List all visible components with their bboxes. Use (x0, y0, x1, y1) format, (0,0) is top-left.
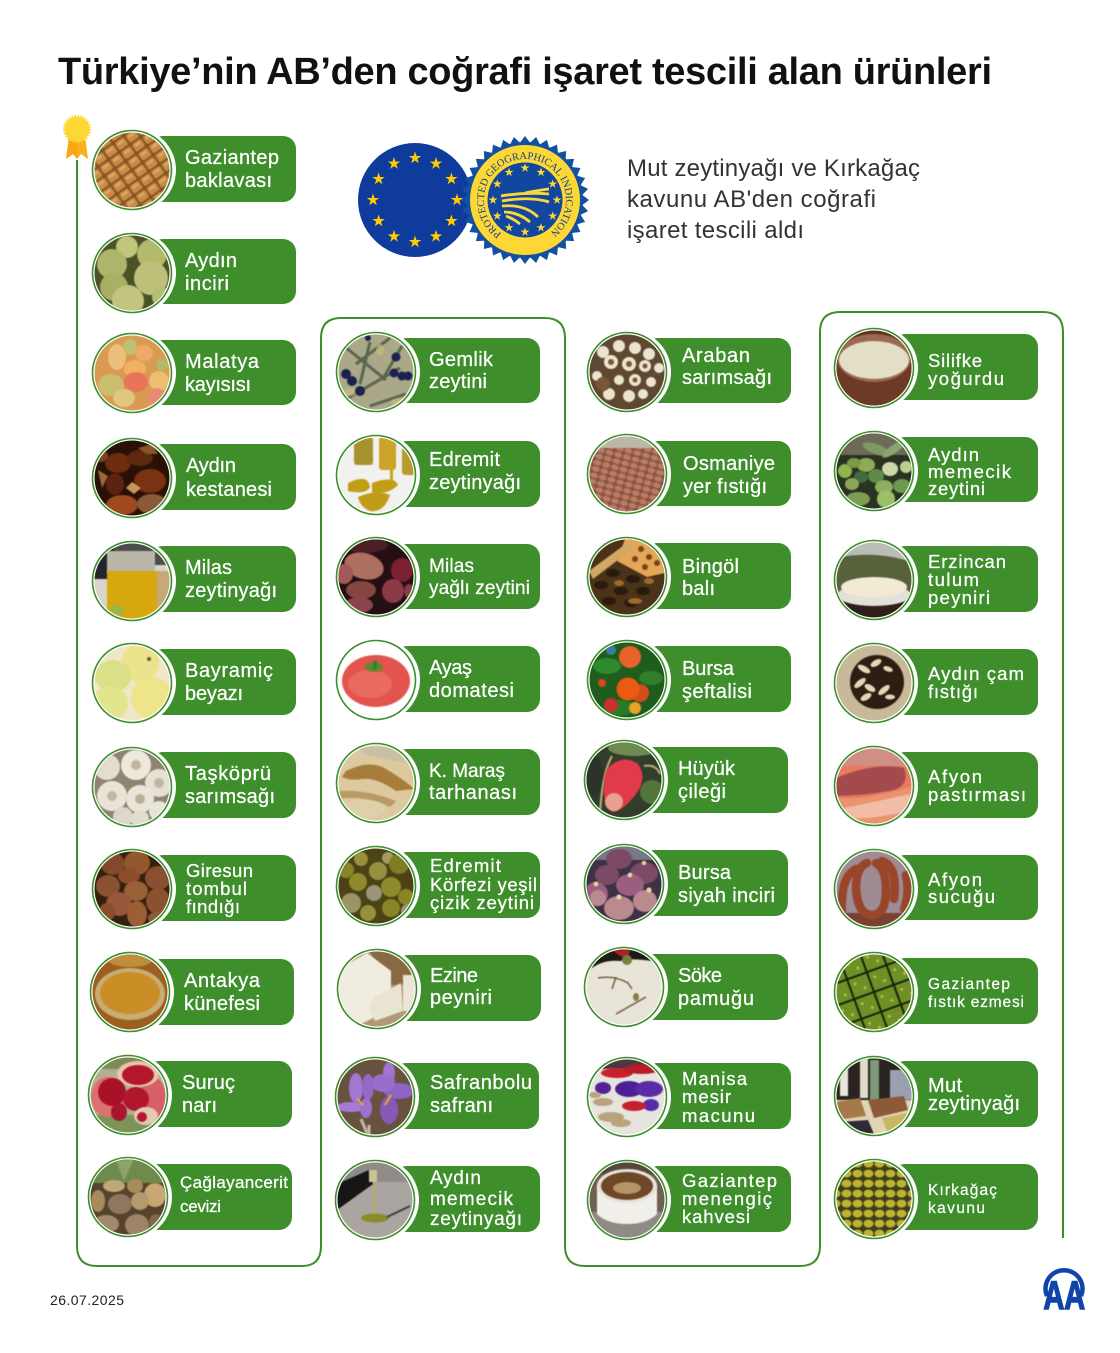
icon: gold rosette medal (64, 116, 90, 159)
photo (339, 951, 415, 1027)
item: Milas zeytinyağı (92, 539, 296, 623)
label: memecik (430, 1189, 514, 1210)
photo (836, 1058, 912, 1134)
label: memecik (928, 461, 1012, 482)
label (928, 1075, 1020, 1115)
label (682, 556, 739, 600)
label: çileği (678, 781, 726, 803)
label: Gaziantep (682, 1170, 777, 1191)
item: Safranbolu safranı (335, 1055, 539, 1139)
photo (585, 740, 664, 818)
label: tulum (928, 569, 979, 590)
ring (88, 1053, 172, 1137)
label: zeytinyağı (429, 472, 521, 494)
ring (335, 1055, 419, 1139)
pill (892, 546, 1038, 612)
photo (836, 433, 912, 509)
ring (336, 741, 420, 825)
label: cevizi (180, 1197, 221, 1216)
ring (584, 842, 668, 926)
ring (92, 847, 176, 931)
intro text (627, 155, 920, 244)
pill (892, 1164, 1038, 1230)
pill (394, 646, 540, 712)
label: tarhanası (429, 782, 517, 804)
pill (642, 850, 788, 916)
timeline border line (77, 160, 1063, 1266)
item: Erzincan tulum peyniri (834, 538, 1038, 622)
intro text: Mut zeytinyağı ve Kırkağaç (627, 155, 920, 182)
label: Ayaş (429, 657, 472, 679)
pill (892, 334, 1038, 400)
ring (92, 539, 176, 623)
pill (150, 649, 296, 715)
label (185, 660, 273, 705)
label: Antakya (184, 970, 261, 992)
photo (589, 642, 665, 718)
pill (892, 1061, 1038, 1127)
label (683, 453, 775, 498)
label (928, 976, 1024, 1011)
item: Edremit zeytinyağı (336, 433, 540, 517)
pill (150, 340, 296, 405)
ring (584, 738, 668, 822)
label: kayısısı (185, 374, 251, 396)
photo (836, 748, 912, 824)
ring (335, 1158, 419, 1242)
photo (336, 1059, 414, 1135)
label (678, 758, 736, 803)
label: yer fıstığı (683, 476, 767, 498)
label: Safranbolu (430, 1072, 532, 1094)
pill (394, 1166, 540, 1232)
label (928, 1182, 997, 1217)
label: Afyon (928, 766, 982, 787)
label: Gaziantep (928, 976, 1010, 993)
label: Bingöl (682, 556, 739, 578)
item: Aydın memecik zeytini (834, 429, 1038, 513)
item: Kırkağaç kavunu (834, 1157, 1038, 1241)
label (186, 860, 253, 917)
label: macunu (682, 1105, 755, 1126)
label (185, 351, 260, 396)
photo (836, 1161, 912, 1237)
photo (584, 846, 662, 922)
ring (587, 432, 671, 516)
ring (834, 847, 918, 931)
photo (338, 437, 418, 513)
label (928, 350, 1004, 389)
label (678, 862, 775, 907)
label (678, 965, 754, 1010)
item: Aydın inciri (92, 231, 296, 317)
photo (589, 334, 665, 410)
item: Çağlayancerit cevizi (88, 1155, 292, 1239)
label (182, 1072, 235, 1117)
pill (394, 749, 540, 815)
label: peyniri (928, 587, 990, 608)
ring (336, 638, 420, 722)
label (430, 1072, 532, 1117)
pill (642, 747, 788, 813)
ring (834, 641, 918, 725)
photo (94, 236, 170, 310)
pill (394, 544, 540, 609)
ring (587, 535, 671, 619)
label (928, 869, 995, 907)
pill (645, 646, 791, 712)
label: Çağlayancerit (180, 1173, 288, 1192)
label: Manisa (682, 1068, 748, 1089)
label: Malatya (185, 351, 260, 373)
item: Milas yağlı zeytini (335, 535, 540, 619)
ring (587, 1055, 671, 1139)
pill (150, 855, 296, 921)
intro text: işaret tescili aldı (627, 217, 804, 244)
label: domatesi (429, 680, 514, 702)
label: sarımsağı (185, 786, 275, 808)
photo (92, 644, 173, 721)
photo (94, 851, 171, 927)
pill (146, 1061, 292, 1127)
label: zeytinyağı (928, 1093, 1020, 1115)
pill (645, 1166, 791, 1232)
label: Ezine (430, 965, 478, 987)
pill (645, 1063, 791, 1129)
label: Araban (682, 345, 750, 367)
item: Ezine peyniri (337, 947, 541, 1031)
label: Edremit (430, 855, 501, 876)
ring (834, 538, 918, 622)
pill (150, 546, 296, 612)
pill (892, 855, 1038, 920)
photo (589, 1059, 665, 1135)
label: zeytinyağı (430, 1209, 522, 1230)
label: Aydın (928, 444, 979, 465)
label: beyazı (185, 683, 243, 705)
item: Aydın kestanesi (92, 436, 296, 520)
label: Aydın (430, 1168, 481, 1189)
photo (589, 539, 665, 615)
pill (150, 239, 296, 304)
item: Antakya künefesi (90, 950, 294, 1034)
ring (587, 638, 671, 722)
label: inciri (185, 273, 229, 295)
photo (94, 749, 173, 828)
label: Giresun (186, 860, 253, 881)
label: safranı (430, 1095, 493, 1117)
label: yağlı zeytini (429, 578, 530, 599)
item: Ayaş domatesi (336, 638, 540, 722)
label: Körfezi yeşil (430, 874, 537, 895)
label (429, 349, 494, 393)
ring (92, 231, 176, 315)
label: Milas (429, 556, 474, 577)
item: Afyon sucuğu (834, 847, 1038, 931)
pill (645, 441, 791, 506)
label (429, 761, 517, 804)
item: Hüyük çileği (584, 738, 788, 822)
item: Silifke yoğurdu (834, 326, 1038, 410)
label: Edremit (429, 449, 500, 471)
label (429, 556, 530, 599)
title: Türkiye’nin AB’den coğrafi işaret tescili alan ürünleri (58, 51, 992, 93)
label: fıstık ezmesi (928, 994, 1024, 1011)
label: kestanesi (186, 479, 272, 501)
label: zeytini (928, 478, 985, 499)
photo (338, 745, 414, 821)
item: Gaziantep menengiç kahvesi (587, 1158, 791, 1242)
item: Gaziantep baklavası (92, 128, 296, 212)
ring (336, 535, 420, 619)
photo (92, 953, 168, 1030)
photo (338, 334, 414, 410)
photo (337, 1162, 413, 1238)
photo (836, 645, 912, 721)
label (185, 250, 237, 295)
label: sarımsağı (682, 367, 772, 389)
label: Hüyük (678, 758, 736, 780)
label: tombul (186, 878, 247, 899)
ring (92, 436, 176, 520)
pill (892, 649, 1038, 715)
label: fındığı (186, 896, 240, 917)
label: kavunu (928, 1200, 985, 1217)
label: siyah inciri (678, 885, 775, 907)
label: Afyon (928, 869, 982, 890)
ring (587, 330, 671, 414)
ring (584, 945, 668, 1029)
label: fıstığı (928, 681, 978, 702)
ring (834, 744, 918, 828)
label: menengiç (682, 1188, 772, 1209)
ring (834, 950, 918, 1034)
item: Suruç narı (88, 1053, 292, 1137)
pill (394, 852, 540, 918)
label (429, 657, 514, 702)
ring (834, 326, 918, 410)
ring (92, 331, 176, 415)
label: K. Maraş (429, 761, 505, 782)
label (430, 965, 492, 1009)
ring (92, 745, 176, 829)
label: Kırkağaç (928, 1182, 997, 1199)
photo (92, 440, 170, 516)
label: Aydın çam (928, 663, 1024, 684)
item: Afyon pastırması (834, 744, 1038, 828)
label: pastırması (928, 784, 1026, 805)
label: Milas (185, 557, 232, 579)
ring (90, 950, 174, 1034)
label (430, 1168, 522, 1230)
ring (834, 1157, 918, 1241)
label: Aydın (186, 455, 236, 477)
label (184, 970, 261, 1015)
label (928, 663, 1024, 702)
item: Edremit Körfezi yeşil çizik zeytini (336, 844, 540, 928)
item: Taşköprü sarımsağı (92, 745, 296, 829)
photo (589, 1162, 665, 1238)
ring (834, 1054, 918, 1138)
photo (836, 542, 912, 618)
item: Aydın memecik zeytinyağı (335, 1158, 540, 1242)
label: balı (682, 578, 715, 600)
photo (94, 543, 170, 619)
label: sucuğu (928, 886, 995, 907)
intro text: kavunu AB'den coğrafi (627, 186, 876, 213)
label (928, 766, 1026, 805)
label: Mut (928, 1075, 962, 1097)
label (185, 147, 279, 192)
pill (642, 954, 788, 1020)
photo (341, 654, 411, 708)
item: Osmaniye yer fıstığı (587, 432, 791, 516)
item: Aydın çam fıstığı (834, 641, 1038, 725)
photo (586, 949, 662, 1025)
label: mesir (682, 1086, 731, 1107)
pill (150, 136, 296, 202)
pill (892, 958, 1038, 1024)
label (928, 551, 1006, 608)
item: Bayramiç beyazı (92, 641, 296, 725)
label (186, 455, 272, 501)
label: çizik zeytini (430, 892, 534, 913)
pill (393, 1063, 539, 1129)
pill (645, 338, 791, 403)
pill (148, 959, 294, 1025)
pill (394, 441, 540, 507)
icon: protected geographical indication seal: PROTECTED GEOGRAPHICAL INDICATION (477, 152, 573, 239)
label: Bursa (682, 658, 735, 680)
pill (892, 437, 1038, 502)
item: Araban sarımsağı (587, 330, 791, 414)
ring (92, 128, 176, 212)
label: pamuğu (678, 988, 754, 1010)
label: baklavası (185, 170, 272, 192)
label: peyniri (430, 987, 492, 1009)
photo (90, 1057, 166, 1133)
ring (336, 433, 420, 517)
item: Bingöl balı (587, 535, 791, 619)
item: Manisa mesir macunu (587, 1055, 791, 1139)
item: Bursa şeftalisi (587, 638, 791, 722)
label: Aydın (185, 250, 237, 272)
photo (94, 335, 170, 411)
icon: protected geographical indication seal (462, 136, 589, 264)
item: Gaziantep fıstık ezmesi (834, 950, 1038, 1034)
label (682, 658, 752, 703)
item: Malatya kayısısı (92, 331, 296, 415)
date: 26.07.2025 (50, 1292, 124, 1308)
label (180, 1173, 288, 1216)
label (430, 855, 537, 913)
photo (836, 330, 912, 406)
ring (92, 641, 176, 725)
item: Bursa siyah inciri (584, 842, 788, 926)
label: Gemlik (429, 349, 494, 371)
ring (336, 330, 420, 414)
label: şeftalisi (682, 681, 752, 703)
pill (150, 444, 296, 510)
label: yoğurdu (928, 368, 1004, 389)
label: Gaziantep (185, 147, 279, 169)
photo (94, 132, 170, 208)
photo (836, 851, 912, 927)
item: K. Maraş tarhanası (336, 741, 540, 825)
pill (645, 543, 791, 609)
ring (587, 1158, 671, 1242)
label (429, 449, 521, 494)
label: zeytinyağı (185, 580, 277, 602)
label (185, 557, 277, 602)
pill (394, 338, 540, 403)
label (682, 1170, 777, 1227)
pill (395, 955, 541, 1021)
label: Suruç (182, 1072, 235, 1094)
label: Erzincan (928, 551, 1006, 572)
label: Taşköprü (185, 763, 271, 785)
photo (589, 436, 665, 512)
ring (834, 429, 918, 513)
photo (338, 848, 415, 924)
ring (336, 844, 420, 928)
item: Giresun tombul fındığı (92, 847, 296, 931)
pill (146, 1164, 292, 1230)
item: Gemlik zeytini (336, 330, 540, 414)
label (185, 763, 275, 808)
pill (150, 752, 296, 818)
label (682, 345, 772, 389)
icon: EU flag circle (358, 143, 472, 257)
label: Osmaniye (683, 453, 775, 475)
label: Silifke (928, 350, 982, 371)
label: narı (182, 1095, 217, 1117)
label (682, 1068, 755, 1126)
photo (335, 537, 414, 615)
label: Bursa (678, 862, 732, 884)
item: Söke pamuğu (584, 945, 788, 1029)
label (928, 444, 1012, 499)
label: zeytini (429, 371, 487, 393)
label: Söke (678, 965, 722, 987)
ring (337, 947, 421, 1031)
photo (836, 954, 912, 1030)
icon: AA logo: AA (1044, 1273, 1085, 1318)
ring (88, 1155, 172, 1239)
label: kahvesi (682, 1206, 750, 1227)
label: künefesi (184, 993, 260, 1015)
label: Bayramiç (185, 660, 273, 682)
item: Mut zeytinyağı (834, 1054, 1038, 1138)
pill (892, 752, 1038, 818)
photo (90, 1159, 166, 1236)
